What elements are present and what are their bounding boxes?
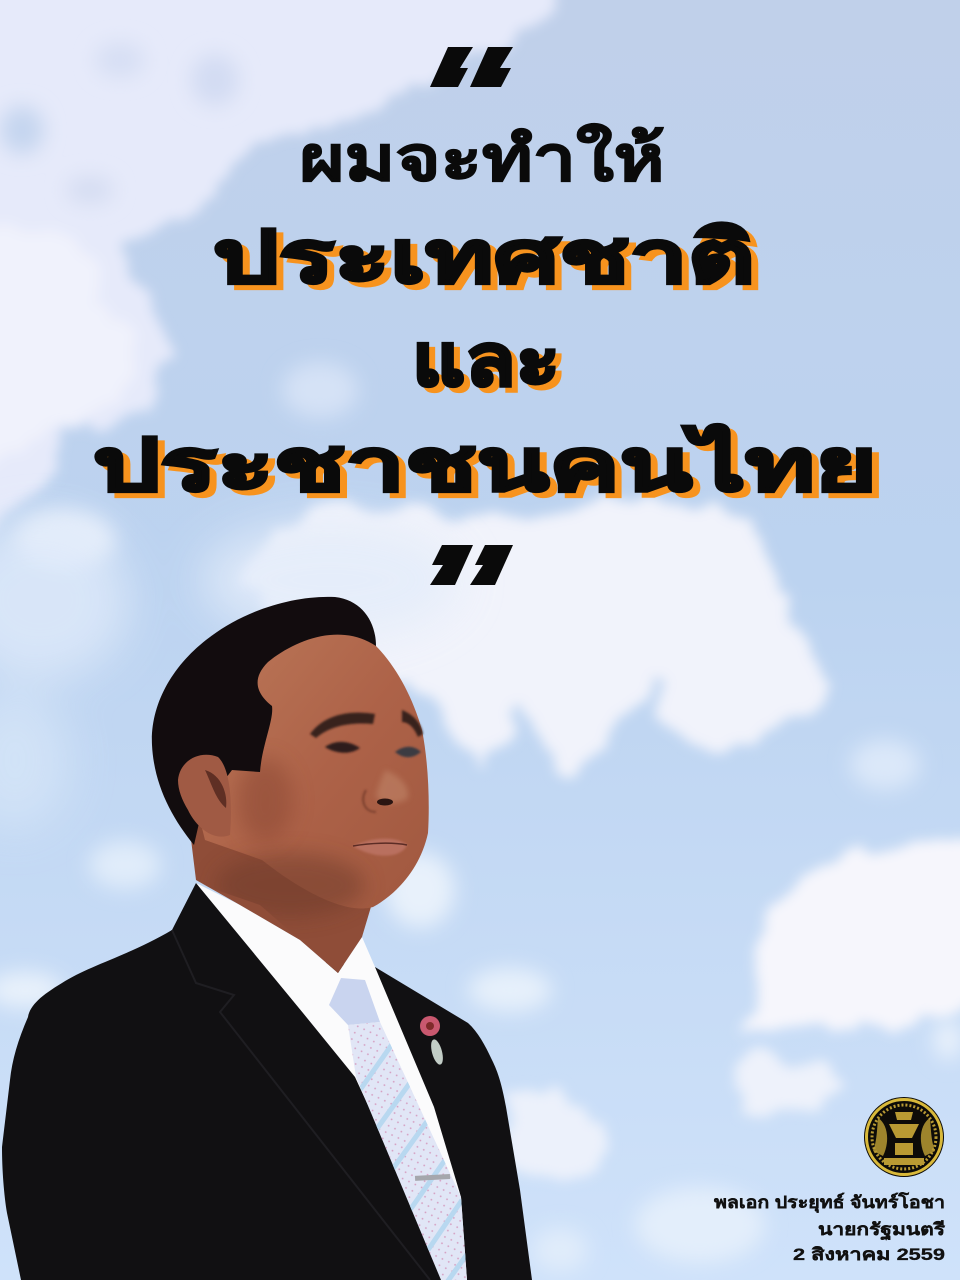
headline line 1: ผมจะทำให้ <box>300 123 664 194</box>
headline line 2 with orange shadow: ประเทศชาติ <box>213 218 755 298</box>
eyes <box>325 742 360 753</box>
headline line 2 with orange shadow <box>213 218 762 303</box>
suit jacket <box>2 883 532 1280</box>
ear <box>178 755 231 837</box>
lips <box>353 839 407 856</box>
emblem: Office of the Prime Minister seal <box>864 1097 944 1177</box>
headline line 4 with orange shadow: ประชาชนคนไทย <box>93 423 877 506</box>
nose <box>376 770 408 803</box>
face <box>152 597 429 917</box>
neck <box>188 815 373 973</box>
signature: name, title and date <box>714 1192 946 1264</box>
eyebrows <box>310 713 375 738</box>
hair <box>152 597 376 845</box>
headline line 3 with orange shadow: และ <box>418 326 566 406</box>
chin and neck shadow <box>215 853 365 917</box>
portrait of the prime minister <box>2 597 532 1280</box>
signature: name, title and date: นายกรัฐมนตรี <box>818 1219 946 1241</box>
closing quotation mark <box>430 545 513 585</box>
shirt <box>196 883 467 1280</box>
tie clip <box>415 1174 450 1181</box>
signature: name, title and date: 2 สิงหาคม 2559 <box>793 1245 945 1264</box>
suit lapel highlights <box>172 930 430 1280</box>
headline line 4 with orange shadow: ประชาชนคนไทย <box>100 428 884 511</box>
opening quotation mark <box>430 47 513 87</box>
headline line 3 with orange shadow: และ <box>412 321 560 401</box>
signature: name, title and date: พลเอก ประยุทธ์ จันทร์โอชา <box>714 1192 945 1213</box>
cheek shading <box>237 758 293 842</box>
headline line 2 with orange shadow: ประเทศชาติ <box>220 223 762 303</box>
headline line 4 with orange shadow <box>93 423 884 511</box>
lapel pins <box>420 1016 445 1066</box>
necktie <box>329 978 470 1280</box>
